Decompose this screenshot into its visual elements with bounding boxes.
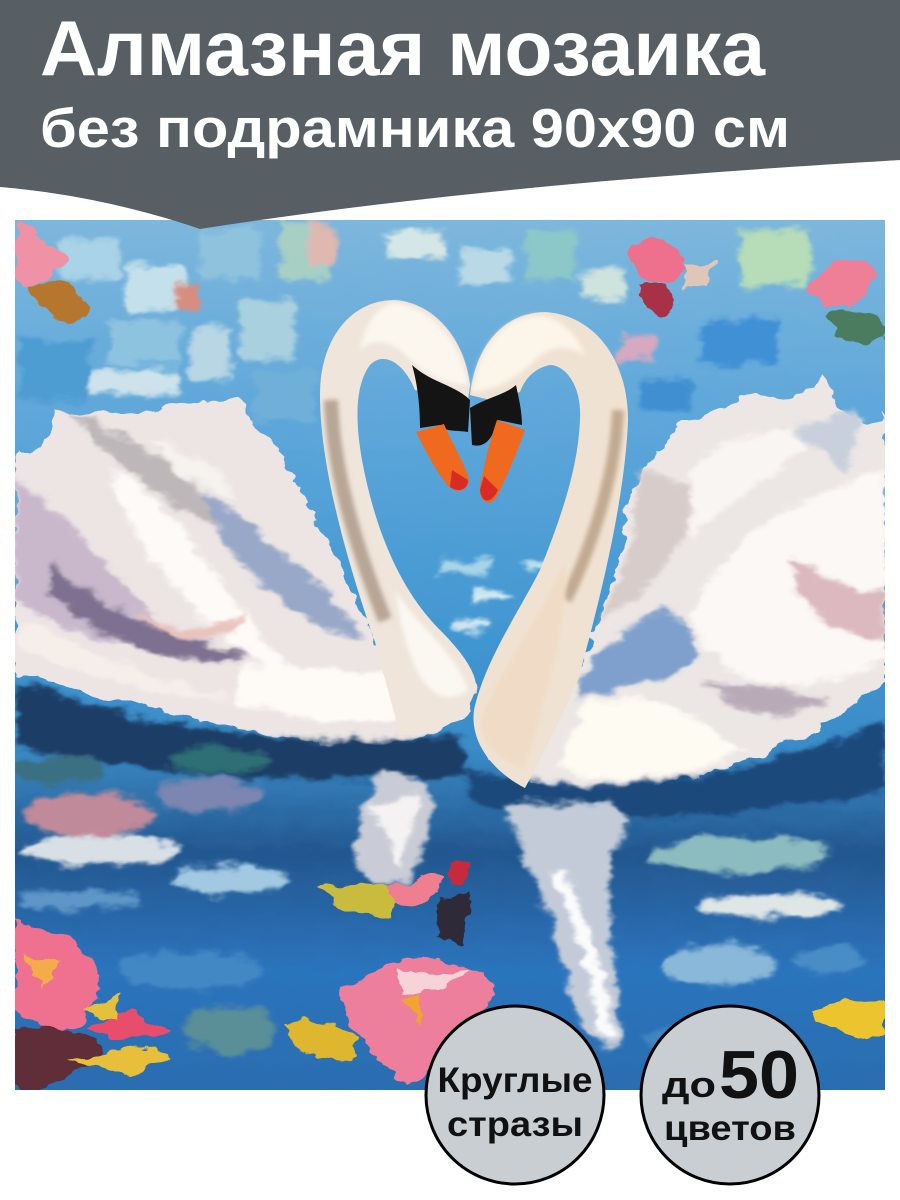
badge: up to 50 colours: 50 xyxy=(719,1037,799,1113)
lily: top left xyxy=(15,222,88,322)
subtitle: без подрамника 90х90 см xyxy=(40,97,790,159)
painting: two swans on a lake xyxy=(0,205,900,1105)
right swan neck and head xyxy=(470,312,628,788)
left swan body xyxy=(15,399,476,742)
title: Алмазная мозаика xyxy=(40,4,766,92)
right swan body xyxy=(475,375,885,791)
water lilies xyxy=(15,222,885,1090)
lily: top right xyxy=(808,259,885,347)
lily reflection: pink and red xyxy=(390,858,470,945)
left swan neck and head xyxy=(320,300,476,735)
lily pad: yellow centre left xyxy=(284,1021,358,1060)
badge: round rhinestones: стразы xyxy=(447,1105,583,1144)
header banner xyxy=(0,0,900,229)
water reflections and dark shoreline xyxy=(15,680,885,1058)
badge: round rhinestones: Круглые xyxy=(438,1061,592,1100)
lily pad: yellow right xyxy=(810,1002,885,1037)
sky-blue brush patches xyxy=(20,225,810,630)
badge: up to 50 colours: до xyxy=(662,1064,716,1105)
badge: up to 50 colours xyxy=(641,1006,819,1184)
badge: up to 50 colours: цветов xyxy=(664,1109,796,1148)
lily: top centre right xyxy=(628,241,715,316)
lily: bottom centre xyxy=(335,960,497,1085)
badge: round rhinestones xyxy=(426,1006,604,1184)
lily: bottom left xyxy=(15,922,170,1090)
lily pad: yellow mid water xyxy=(318,884,400,915)
swan faces: black masks and orange beaks xyxy=(412,365,525,502)
